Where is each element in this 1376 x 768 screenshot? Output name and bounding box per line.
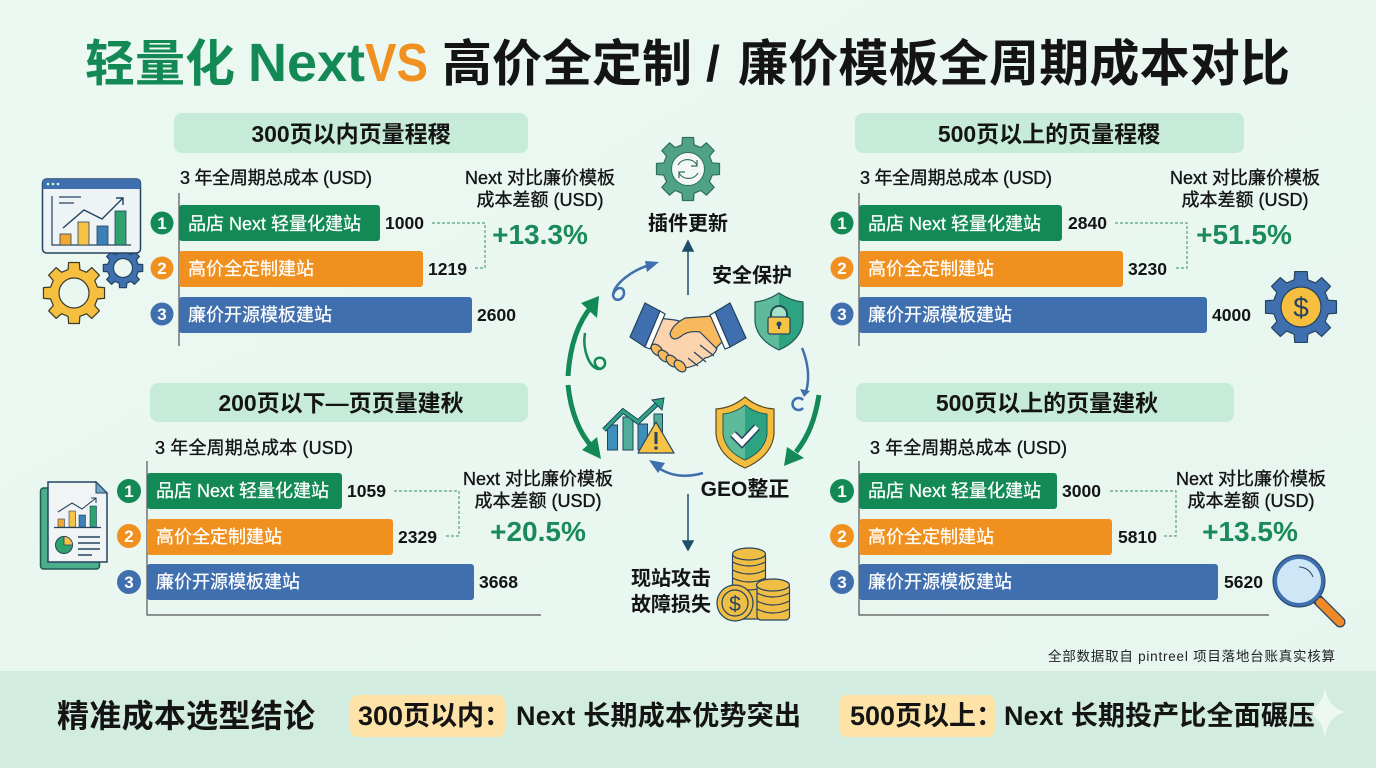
heading pill bbox=[174, 113, 528, 153]
bar chart: 3 bbox=[124, 573, 134, 592]
chart subtitle: 3 年全周期总成本 (USD) bbox=[870, 438, 1067, 458]
chart subtitle: 3 年全周期总成本 (USD) bbox=[180, 168, 372, 188]
bar chart: 2 bbox=[124, 527, 134, 546]
heading pill: 200页以下—页页量建秋 bbox=[218, 390, 464, 416]
bar chart: 1 bbox=[124, 482, 134, 501]
comparison callout: 成本差额 (USD) bbox=[474, 491, 602, 511]
bar chart bbox=[830, 461, 1269, 615]
conclusion 2: Next 长期投产比全面碾压 bbox=[1004, 701, 1315, 731]
bar chart: 1219 bbox=[428, 259, 467, 279]
bar chart: 品店 Next 轻量化建站 bbox=[868, 481, 1041, 501]
arrow: green curl bbox=[584, 333, 605, 369]
bar chart: 高价全定制建站 bbox=[156, 527, 282, 547]
comparison callout bbox=[1176, 469, 1326, 547]
icon: dashboard and gears bbox=[42, 179, 143, 324]
icon: report document bbox=[40, 482, 107, 569]
conclusion 1: Next 长期成本优势突出 bbox=[516, 701, 801, 731]
conclusion 1: 300页以内： bbox=[358, 701, 511, 731]
bar chart: 1059 bbox=[347, 481, 386, 501]
title: 轻量化 bbox=[85, 36, 235, 92]
bar chart: 高价全定制建站 bbox=[868, 527, 994, 547]
panel: 500 pages bottom-right bbox=[830, 383, 1326, 615]
bar chart: 3 bbox=[837, 305, 847, 324]
bar chart: 1 bbox=[157, 214, 167, 233]
bar chart: 高价全定制建站 bbox=[868, 259, 994, 279]
arrow: blue curl lower right bbox=[793, 348, 810, 410]
comparison callout: Next 对比廉价模板 bbox=[465, 168, 615, 188]
bar chart: 廉价开源模板建站 bbox=[868, 305, 1012, 325]
bar chart: 3 bbox=[837, 573, 847, 592]
comparison callout bbox=[1170, 168, 1320, 250]
arrow: big green down-right bbox=[784, 395, 819, 466]
comparison callout: 成本差额 (USD) bbox=[1182, 190, 1308, 210]
bar chart: 1000 bbox=[385, 213, 424, 233]
bar chart: 5620 bbox=[1224, 572, 1263, 592]
bar chart: 品店 Next 轻量化建站 bbox=[156, 481, 329, 501]
conclusion heading: 精准成本选型结论 bbox=[57, 698, 315, 734]
bar chart bbox=[117, 461, 541, 615]
bar chart: 廉价开源模板建站 bbox=[156, 572, 300, 592]
icon: handshake bbox=[630, 303, 746, 374]
comparison callout: 成本差额 (USD) bbox=[476, 190, 604, 210]
arrow: down bbox=[683, 494, 693, 550]
title: 廉价模板全周期成本对比 bbox=[738, 36, 1290, 92]
icon: sparkle bbox=[1305, 688, 1345, 738]
bar chart: 品店 Next 轻量化建站 bbox=[188, 214, 361, 234]
heading pill bbox=[856, 383, 1234, 422]
bar chart: 2 bbox=[157, 259, 167, 278]
label: loss: 故障损失 bbox=[631, 593, 711, 616]
arrow: big green up-left bbox=[568, 296, 599, 376]
panel: 300 pages top-left bbox=[150, 113, 615, 346]
comparison callout: 成本差额 (USD) bbox=[1188, 491, 1314, 511]
title: VS bbox=[365, 33, 428, 93]
title bbox=[85, 33, 1290, 93]
panel: 200 pages bottom-left bbox=[117, 383, 613, 615]
panel: conclusion footer bbox=[0, 671, 1376, 768]
title: 高价全定制 bbox=[442, 36, 692, 92]
comparison callout: Next 对比廉价模板 bbox=[463, 469, 613, 489]
heading pill bbox=[150, 383, 528, 422]
bar chart bbox=[150, 193, 516, 346]
bar chart: 1 bbox=[837, 482, 847, 501]
footnote: 全部数据取自 pintreel 项目落地台账真实核算 bbox=[1048, 648, 1335, 664]
bar chart: 2840 bbox=[1068, 213, 1107, 233]
bar chart: 廉价开源模板建站 bbox=[188, 305, 332, 325]
comparison callout: +13.3% bbox=[492, 219, 588, 250]
title: / bbox=[706, 36, 720, 92]
bar chart: 廉价开源模板建站 bbox=[868, 572, 1012, 592]
icon: dollar gear bbox=[1266, 272, 1336, 342]
label: GEO: GEO整正 bbox=[701, 478, 789, 501]
icon: magnifier bbox=[1273, 555, 1340, 622]
bar chart: 2 bbox=[837, 527, 847, 546]
icon: dollar gear: $ bbox=[1293, 292, 1309, 323]
bar chart: 3 bbox=[157, 305, 167, 324]
bar chart: 3230 bbox=[1128, 259, 1167, 279]
heading pill: 500页以上的页量建秋 bbox=[936, 390, 1158, 416]
icon: growth risk chart bbox=[604, 398, 674, 453]
central cost cycle diagram bbox=[568, 137, 819, 621]
icon: coin stacks bbox=[717, 548, 790, 621]
bar chart: 3668 bbox=[479, 572, 518, 592]
icon: security shield bbox=[755, 293, 803, 350]
comparison callout bbox=[463, 469, 613, 547]
bar chart: 高价全定制建站 bbox=[188, 259, 314, 279]
label: security: 安全保护 bbox=[712, 263, 792, 287]
icon: plugin update gear bbox=[656, 137, 720, 201]
comparison callout: +13.5% bbox=[1202, 516, 1298, 547]
label: plugin update: 插件更新 bbox=[648, 212, 728, 235]
bar chart bbox=[830, 193, 1251, 346]
bar chart: 2 bbox=[837, 259, 847, 278]
arrow: blue curl to upper right bbox=[613, 261, 659, 300]
heading pill: 300页以内页量程稷 bbox=[251, 121, 451, 147]
title: Next bbox=[248, 33, 365, 93]
icon: coin stacks: $ bbox=[729, 593, 741, 616]
bar chart: 品店 Next 轻量化建站 bbox=[868, 214, 1041, 234]
arrow: big green down-left bbox=[568, 385, 601, 459]
heading pill: 500页以上的页量程稷 bbox=[938, 121, 1160, 147]
bar chart: 5810 bbox=[1118, 527, 1157, 547]
comparison callout bbox=[465, 168, 615, 250]
comparison callout: Next 对比廉价模板 bbox=[1176, 469, 1326, 489]
comparison callout: +51.5% bbox=[1196, 219, 1292, 250]
bar chart: 2600 bbox=[477, 305, 516, 325]
bar chart: 2329 bbox=[398, 527, 437, 547]
comparison callout: Next 对比廉价模板 bbox=[1170, 168, 1320, 188]
comparison callout: +20.5% bbox=[490, 516, 586, 547]
chart subtitle: 3 年全周期总成本 (USD) bbox=[155, 438, 353, 458]
conclusion 2 bbox=[839, 695, 1315, 737]
arrow: up bbox=[683, 241, 693, 295]
chart subtitle: 3 年全周期总成本 (USD) bbox=[860, 168, 1052, 188]
arrow: blue to chart bbox=[649, 460, 703, 476]
panel: 500 pages top-right bbox=[830, 113, 1320, 346]
icon: compliance shield bbox=[716, 397, 774, 468]
label: loss: 现站攻击 bbox=[631, 568, 711, 590]
bar chart: 1 bbox=[837, 214, 847, 233]
conclusion 1 bbox=[350, 695, 801, 737]
conclusion 2: 500页以上： bbox=[850, 701, 1003, 731]
bar chart: 4000 bbox=[1212, 305, 1251, 325]
bar chart: 3000 bbox=[1062, 481, 1101, 501]
heading pill bbox=[855, 113, 1244, 153]
